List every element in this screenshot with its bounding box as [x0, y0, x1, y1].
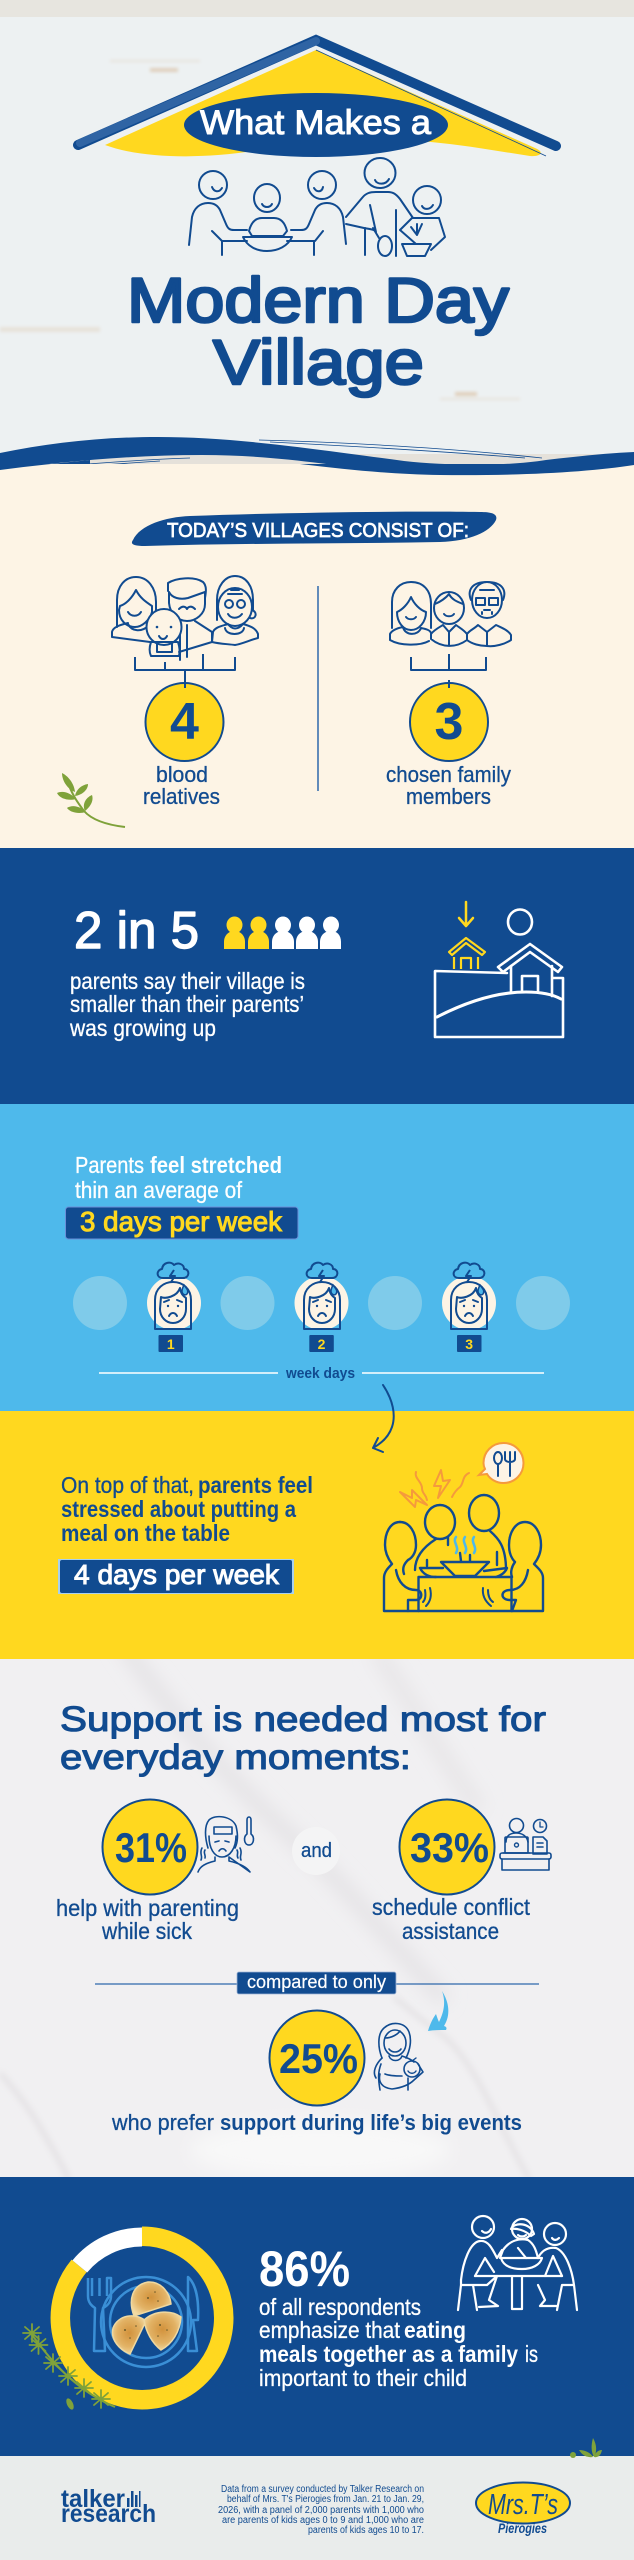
icon: four blood relatives	[112, 576, 258, 660]
icon: sick parent	[198, 1817, 253, 1872]
stat: 33%: 33%	[410, 1824, 489, 1871]
marble background	[0, 1640, 634, 2180]
connector text: and: and	[301, 1840, 332, 1862]
stat: 86%: 86%	[259, 2241, 350, 2297]
stat: 4 circle: 4	[170, 693, 199, 751]
label: help with parenting while sick: while sick	[101, 1918, 192, 1944]
label: day 1: 1	[167, 1336, 175, 1352]
icon: stressed family at dinner table	[384, 1443, 543, 1611]
icon: work desk	[500, 1818, 551, 1870]
heading: everyday moments:	[60, 1738, 411, 1777]
icon: family at table	[458, 2216, 577, 2310]
axis: week days: week days	[285, 1365, 355, 1382]
label: schedule conflict assistance	[372, 1894, 531, 1944]
stat: 25%	[270, 2010, 364, 2106]
panel: header	[0, 0, 634, 478]
label: who prefer support	[111, 2110, 522, 2135]
title: What Makes a: What Makes a	[200, 104, 431, 142]
image: pierogies	[112, 2282, 181, 2354]
label: who prefer support: who prefer	[111, 2110, 214, 2135]
text: stressed about meal: parents feel	[198, 1472, 313, 1498]
icon: family cooking and eating	[189, 158, 445, 256]
text: respondents: is	[525, 2341, 538, 2367]
heading banner	[132, 512, 496, 546]
panel: 86 percent	[0, 2177, 634, 2456]
brush wave	[0, 437, 634, 478]
panel: support	[0, 1640, 634, 2180]
wood background	[0, 0, 634, 466]
text: parents feel stretched: Parents	[75, 1152, 144, 1178]
text: parents say: was growing up	[69, 1015, 216, 1041]
text: parents say	[69, 968, 305, 1041]
icon: green sprig with stars	[23, 2324, 115, 2411]
text: stressed about meal: On top of that,	[61, 1472, 194, 1498]
text: methodology: Data from a survey conducted by Talker Research on	[221, 2484, 424, 2495]
logo: talker research: talker	[61, 2485, 125, 2513]
text: methodology: parents of kids ages 10 to 17.	[308, 2525, 424, 2536]
panel: 2 in 5	[0, 848, 634, 1104]
panel: today's villages	[0, 460, 634, 848]
text: methodology: behalf of Mrs. T's Pierogies from Jan. 21 to Jan. 29,	[227, 2494, 424, 2505]
callout: 4 days per week: 4 days per week	[74, 1559, 280, 1590]
divider: compared to only	[95, 1972, 539, 1994]
label: chosen family members	[386, 762, 511, 809]
text: methodology: are parents of kids ages 0 to 9 and 1,000 who are	[222, 2515, 424, 2526]
text: respondents: of all respondents	[259, 2294, 421, 2320]
arrow: to yellow panel	[373, 1385, 394, 1452]
icon row: five people	[224, 916, 341, 949]
label: schedule conflict assistance: schedule conflict	[372, 1894, 531, 1920]
stat: 4 circle	[146, 680, 224, 761]
logo: Mrs. T's Pierogies	[476, 2482, 570, 2536]
icon: small and big house on hill	[435, 902, 563, 1037]
label: day 3	[457, 1335, 482, 1352]
heading: Support is needed most for	[60, 1700, 546, 1739]
label: day 2: 2	[318, 1336, 326, 1352]
logo: Mrs. T's Pierogies: Pierogies	[498, 2520, 547, 2536]
logo: talker research: research	[61, 2500, 156, 2528]
callout: 3 days per week: 3 days per week	[80, 1206, 283, 1237]
logo: Mrs. T's Pierogies: Mrs.T’s	[488, 2489, 558, 2521]
text: respondents: important to their child	[259, 2365, 467, 2391]
heading	[60, 1700, 546, 1777]
stat: 33%	[400, 1800, 494, 1894]
arrow: light blue	[428, 1991, 448, 2031]
label: day 1	[158, 1335, 183, 1352]
label: blood relatives: relatives	[143, 784, 220, 809]
icon: plate fork knife	[88, 2277, 198, 2367]
panel: stretched thin	[0, 1104, 634, 1411]
stat: 25%: 25%	[279, 2035, 358, 2082]
text: stressed about meal: meal on the table	[61, 1520, 230, 1546]
panel: footer	[0, 2438, 634, 2560]
label: chosen family members: members	[406, 784, 491, 809]
label: chosen family members: chosen family	[386, 762, 511, 787]
divider	[317, 586, 319, 791]
brush wave repeat over cream	[0, 460, 634, 475]
text: parents say: smaller than their parents’	[70, 991, 304, 1017]
label: day 3: 3	[465, 1336, 473, 1352]
label: schedule conflict assistance: assistance	[402, 1918, 499, 1944]
icon: green sprig	[57, 773, 125, 827]
stat: 31%: 31%	[115, 1824, 187, 1871]
connector: left bracket	[135, 654, 235, 688]
text: stressed about meal	[61, 1472, 313, 1546]
text: parents feel stretched	[75, 1152, 282, 1203]
text: parents feel stretched: thin an average of	[75, 1177, 243, 1203]
label: blood relatives	[143, 762, 220, 809]
text: respondents: meals together as a family	[259, 2341, 518, 2367]
label: who prefer support: support during life’s big events	[220, 2110, 522, 2135]
stat: 2 in 5: 2 in 5	[74, 902, 199, 960]
chart: week days circles	[73, 1263, 570, 1352]
stat: 31%	[102, 1800, 198, 1894]
icon: stressed face 3	[451, 1263, 487, 1329]
stat: 3 circle: 3	[435, 693, 463, 751]
chart: donut 86 percent	[60, 2236, 224, 2400]
title: Modern Day Village: Village	[213, 328, 424, 398]
text: methodology	[218, 2484, 424, 2536]
label: blood relatives: blood	[156, 762, 208, 787]
text: respondents: eating	[404, 2317, 466, 2343]
roof	[78, 40, 556, 157]
icon: mother and baby	[374, 2023, 423, 2090]
label: help with parenting while sick	[56, 1895, 239, 1944]
label: day 2	[309, 1335, 334, 1352]
connector: right bracket	[411, 654, 486, 670]
text: respondents: emphasize that	[259, 2317, 401, 2343]
icon: stressed face 2	[304, 1263, 340, 1329]
heading banner: TODAY’S VILLAGES CONSIST OF:	[167, 520, 469, 542]
text: respondents	[259, 2294, 538, 2391]
title: Modern Day Village	[127, 266, 510, 398]
icon: green sprout	[570, 2438, 602, 2458]
label: help with parenting while sick: help with parenting	[56, 1895, 239, 1921]
text: parents feel stretched: feel stretched	[150, 1152, 282, 1178]
text: parents say: parents say their village is	[70, 968, 305, 994]
icon: stressed face 1	[155, 1263, 191, 1329]
logo: talker research	[61, 2485, 156, 2528]
text: stressed about meal: stressed about putting a	[61, 1496, 296, 1522]
icon: three chosen family	[390, 582, 511, 646]
title: Modern Day Village: Modern Day	[127, 266, 510, 336]
panel: stressed about meals	[0, 1385, 634, 1659]
stat: 3 circle	[410, 680, 488, 761]
text: methodology: 2026, with a panel of 2,000 parents with 1,000 who	[218, 2505, 424, 2516]
connector text: and	[292, 1827, 340, 1875]
divider: compared to only: compared to only	[247, 1972, 386, 1992]
